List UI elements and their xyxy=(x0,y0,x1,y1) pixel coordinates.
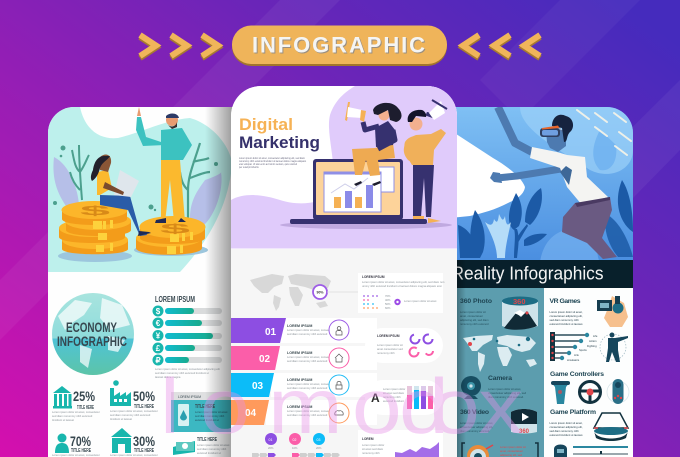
underwater illustration xyxy=(440,107,633,262)
title pill: INFOGRAPHIC xyxy=(253,34,426,58)
heading: Marketing xyxy=(239,133,320,152)
eye tracking xyxy=(462,443,538,457)
stat: 30%: TITLE HERE xyxy=(134,448,154,454)
stat: 30%: Lorem ipsum dolor sit amet, consectetur xyxy=(110,453,158,457)
donut pill card: LOREM IPSUM xyxy=(377,334,400,338)
panel: economy infographic xyxy=(48,107,238,457)
donut pill card: nonummy nibh xyxy=(377,351,395,355)
currency bars: Lorem ipsum dolor sit amet, consectetur adipiscing elit xyxy=(155,367,220,371)
currency bars: ¥ xyxy=(156,332,161,340)
VR games: euismod tincidunt ut laoreet. xyxy=(550,322,583,326)
area chart card: Lorem ipsum dolor xyxy=(362,443,384,447)
360 photo xyxy=(460,296,538,330)
stat: 50%: 50% xyxy=(133,388,155,404)
game platform xyxy=(550,409,628,441)
step 03 xyxy=(231,373,349,397)
water item box: LOREM IPSUM xyxy=(178,394,201,399)
game platform: sed diam nonummy nibh xyxy=(550,429,579,433)
teal hero blob xyxy=(48,107,232,272)
step 01: LOREM IPSUM xyxy=(287,324,312,328)
step 01: Lorem ipsum dolor sit amet, consec xyxy=(287,328,330,332)
genre lever chart xyxy=(550,332,598,362)
currency bars: € xyxy=(156,319,161,328)
360 video: diam nonummy euismod xyxy=(460,429,490,433)
globe with title: ECONOMY xyxy=(66,319,117,335)
progress circles: 01 xyxy=(268,438,272,442)
camera: consectetuer adipiscing elit, sed xyxy=(488,391,527,395)
panel: virtual reality infographic xyxy=(440,107,633,457)
top right info card: LOREM IPSUM xyxy=(362,275,385,279)
money item xyxy=(173,437,230,455)
left teal panel xyxy=(457,288,544,457)
left chevrons xyxy=(140,35,218,58)
world map xyxy=(463,335,537,372)
genre lever chart: simulators xyxy=(567,358,580,362)
stat: 25%: TITLE HERE xyxy=(77,405,94,411)
header banner xyxy=(140,26,540,66)
man with megaphone xyxy=(404,100,447,223)
stat: 25%: tincidunt ut laoreet xyxy=(52,418,74,422)
hero lavender background xyxy=(231,86,457,249)
game platform: euismod tincidunt ut laoreet. xyxy=(550,433,583,437)
man waving xyxy=(136,107,192,223)
step 04: sed diam nonummy nibh euismod xyxy=(287,413,328,417)
water item box: euismod tincidunt ut xyxy=(195,418,219,422)
360 video: Lorem ipsum dolor sit amet, xyxy=(460,421,493,425)
game controllers xyxy=(550,371,629,404)
world map with donut: 90% xyxy=(316,290,324,294)
money item: Lorem ipsum dolor sit amet xyxy=(197,443,230,447)
VR games: VR Games xyxy=(550,298,581,305)
progress circles: 03 xyxy=(316,438,320,442)
globe with title xyxy=(52,293,134,375)
water item box: sed diam nonummy nibh xyxy=(195,414,225,418)
stat: 50%: tincidunt ut laoreet xyxy=(110,417,132,421)
bar chart pill card: Lorem ipsum dolor xyxy=(383,387,405,391)
step 02: sed diam nonummy nibh euismod xyxy=(287,359,328,363)
genre lever chart: Arts xyxy=(574,353,579,357)
360 photo: adipiscing elit, sed diam xyxy=(460,318,489,322)
black title band: Reality Infographics xyxy=(452,262,604,284)
game controllers: Game Controllers xyxy=(550,371,604,378)
area chart card: nonummy nibh xyxy=(362,451,380,455)
step 01: 01 xyxy=(265,327,277,338)
right chevrons xyxy=(463,35,540,58)
camera xyxy=(461,375,527,399)
eye tracking: amet, consectetuer xyxy=(500,449,523,453)
area chart card: sit amet sed diam xyxy=(362,447,384,451)
step 04: LOREM IPSUM xyxy=(287,405,312,409)
bar chart pill card: nonummy nibh xyxy=(383,395,401,399)
area chart card xyxy=(358,430,443,457)
black title band xyxy=(440,260,633,288)
genre lever chart: Sports xyxy=(579,348,587,352)
stat: 25%: sed diam nonummy nibh euismod xyxy=(52,414,93,418)
game platform: consectetuer adipiscing elit, xyxy=(550,425,583,429)
top right info card: 40% xyxy=(385,298,391,302)
step 02: 02 xyxy=(259,354,271,365)
left coin stack xyxy=(58,201,132,262)
title pill xyxy=(232,26,447,66)
currency bars: ₽ xyxy=(155,356,161,365)
currency bars: LOREM IPSUM xyxy=(155,295,195,304)
heading: Lorem ipsum dolor sit amet, consectetur adipiscing elit, sed diam xyxy=(239,157,305,160)
camera: Camera xyxy=(488,375,512,382)
360 video: 360 Video xyxy=(460,409,489,416)
stat: 70% xyxy=(52,433,100,457)
bar chart pill card: sit amet sed diam xyxy=(383,391,405,395)
VR games: Lorem ipsum dolor sit amet, xyxy=(550,310,583,314)
step 01: sed diam nonummy nibh euismod xyxy=(287,332,328,336)
progress circles: 20% xyxy=(268,446,274,450)
currency bars: laoreet dolore magna xyxy=(155,375,181,379)
top right info card: 60% xyxy=(385,306,391,310)
step 02 xyxy=(231,346,349,370)
bar chart pill card xyxy=(365,380,443,415)
area chart card: LOREM xyxy=(362,437,374,441)
360 photo: 360 xyxy=(513,297,526,306)
360 photo: Lorem ipsum dolor sit xyxy=(460,310,486,314)
heading: erat volutpat. Ut wisi enim ad minim veniam, quis nostrud xyxy=(239,163,298,166)
plants xyxy=(53,143,222,225)
currency bars: sed diam nonummy nibh euismod tincidunt ut xyxy=(155,371,209,375)
bar chart pill card: A xyxy=(371,391,380,405)
VR games xyxy=(550,296,628,327)
eye tracking: adipiscing elit, sed xyxy=(500,453,522,457)
game platform: Lorem ipsum dolor sit amet, xyxy=(550,421,583,425)
step 02: Lorem ipsum dolor sit amet, consec xyxy=(287,355,330,359)
step 04: 04 xyxy=(245,408,257,419)
stat: 25% xyxy=(52,386,100,422)
currency bars: £ xyxy=(156,344,161,353)
camera: Lorem ipsum dolor sit amet, xyxy=(488,387,521,391)
stat: 25%: Lorem ipsum dolor sit amet, consectetur xyxy=(52,410,100,414)
step 03: LOREM IPSUM xyxy=(287,378,312,382)
360 video: consectetuer adipiscing elit, xyxy=(460,425,493,429)
stat: 70%: 70% xyxy=(70,433,91,449)
genre lever chart: Action xyxy=(589,339,597,343)
stat: 50%: Lorem ipsum dolor sit amet, consectetur xyxy=(110,409,158,413)
step 01 xyxy=(231,318,349,343)
stat: 50% xyxy=(110,380,158,421)
water item box xyxy=(171,392,231,432)
heading: nonummy nibh euismod tincidunt ut laoreet dolore magna aliquam xyxy=(239,160,306,163)
top right info card: Lorem ipsum dolor sit amet xyxy=(404,299,437,303)
game platform: Game Platform xyxy=(550,409,596,416)
donut pill card xyxy=(365,328,443,363)
title pill: INFOGRAPHIC xyxy=(252,32,425,58)
top right info card: 50% xyxy=(385,302,391,306)
stat: 50%: TITLE HERE xyxy=(134,404,154,410)
bar chart pill card: euismod tincidunt xyxy=(383,399,404,403)
progress circles: 20% xyxy=(316,446,322,450)
money item: euismod tincidunt ut xyxy=(197,451,221,455)
watermark: lomodox xyxy=(160,362,523,450)
progress circles: 10% xyxy=(292,446,298,450)
eye tracking: Lorem ipsum dolor sit xyxy=(500,445,526,449)
step rows xyxy=(231,318,377,425)
genre lever chart: Fighting xyxy=(587,344,597,348)
top right info card xyxy=(358,273,445,313)
genre lever chart: Life xyxy=(593,334,598,338)
progress circles xyxy=(252,433,340,457)
stat: 30% xyxy=(110,428,158,457)
VR games: sed diam nonummy nibh xyxy=(550,318,579,322)
top right info card: Lorem ipsum dolor sit amet, consectetur adipiscing elit, sed diam non xyxy=(362,280,445,284)
right coin stack xyxy=(134,216,208,256)
step 02: LOREM IPSUM xyxy=(287,351,312,355)
stat: 25%: 25% xyxy=(73,388,95,404)
360 photo: 360 Photo xyxy=(460,298,492,305)
fish xyxy=(577,110,631,155)
donut pill card: Lorem ipsum dolor sit xyxy=(377,343,403,347)
stat: 70%: TITLE HERE xyxy=(71,448,91,454)
donut pill card: amet consectetur sed xyxy=(377,347,403,351)
leaves xyxy=(458,180,633,258)
water item box: Lorem ipsum dolor sit amet xyxy=(195,410,228,414)
stat: 30%: 30% xyxy=(133,433,155,449)
heading xyxy=(239,115,320,169)
360 video xyxy=(460,409,537,435)
360 photo: nonummy nibh euismod xyxy=(460,322,489,326)
money item: sed diam nonummy nibh xyxy=(197,447,227,451)
top right info card: 70% xyxy=(385,294,391,298)
VR games: consectetuer adipiscing elit, xyxy=(550,314,583,318)
step 04: Lorem ipsum dolor sit amet, consec xyxy=(287,409,330,413)
globe with title: INFOGRAPHIC xyxy=(57,333,127,349)
progress circles: 02 xyxy=(292,438,296,442)
VR person xyxy=(490,107,617,259)
camera: diam nonummy nibh euismod. xyxy=(488,395,524,399)
360 photo: amet, consectetuer xyxy=(460,314,483,318)
stat: 70%: Lorem ipsum dolor sit amet, consectetur xyxy=(52,453,100,457)
step 04 xyxy=(231,400,349,425)
world map with donut xyxy=(250,274,358,311)
right white panel xyxy=(544,288,633,457)
step 03: sed diam nonummy nibh euismod xyxy=(287,386,328,390)
currency bars: $ xyxy=(156,307,161,316)
360 video: 360 xyxy=(519,429,530,435)
water item box: TITLE HERE xyxy=(195,404,215,410)
white blob xyxy=(457,134,525,218)
currency bars xyxy=(152,295,222,379)
heading: per suscipit lobortis xyxy=(239,166,260,169)
right coin stack: $ xyxy=(160,221,193,236)
laptop with chart xyxy=(280,159,452,229)
step 03: 03 xyxy=(252,381,264,392)
woman with laptop xyxy=(91,155,151,236)
shooter silhouette xyxy=(600,332,628,362)
money item: TITLE HERE xyxy=(197,437,217,443)
panel: digital marketing xyxy=(231,86,457,457)
step 03: Lorem ipsum dolor sit amet, consec xyxy=(287,382,330,386)
stat: 50%: sed diam nonummy nibh euismod xyxy=(110,413,151,417)
platform accessories xyxy=(554,444,628,457)
top right info card: ummy nibh euismod tincidunt ut laoreet dolore magna aliquam erat xyxy=(362,284,442,288)
woman with megaphone xyxy=(345,102,402,186)
heading: Digital xyxy=(239,115,293,134)
left coin stack: $ xyxy=(80,203,113,218)
